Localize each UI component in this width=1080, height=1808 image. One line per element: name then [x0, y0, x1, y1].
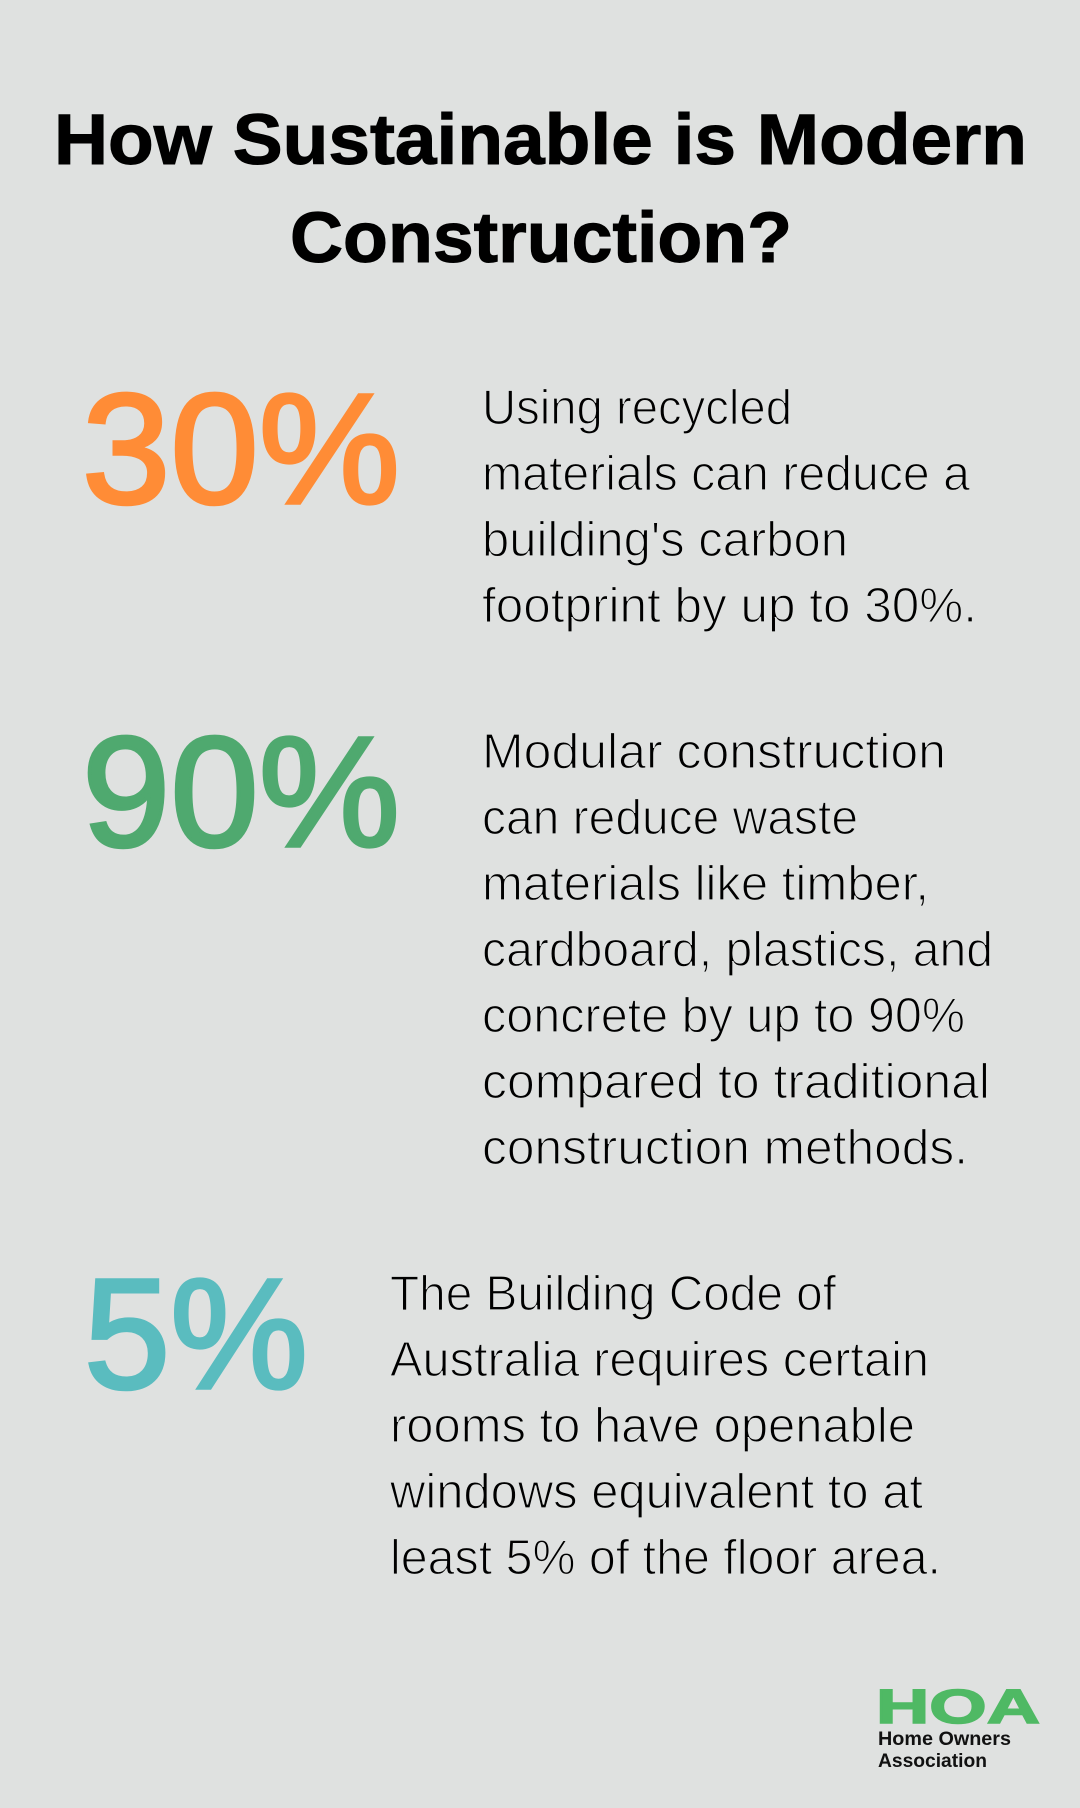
- stat: 5% openable windows: [84, 1247, 941, 1585]
- text: recycled materials description: materials can reduce a: [482, 447, 971, 501]
- logo: Home Owners Association: [876, 1681, 1040, 1772]
- stat: 30% recycled materials: [82, 362, 977, 633]
- text: building code description: [389, 1267, 941, 1585]
- text: modular construction description: can reduce waste: [482, 791, 858, 845]
- logo text: Association: [878, 1751, 987, 1772]
- text: recycled materials description: [482, 381, 977, 633]
- text: building code description: rooms to have openable: [390, 1399, 915, 1453]
- text: modular construction description: compared to traditional: [482, 1055, 990, 1109]
- text: modular construction description: concrete by up to 90%: [482, 989, 965, 1043]
- text: recycled materials description: Using recycled: [482, 381, 792, 435]
- logo text: [878, 1729, 1011, 1772]
- text: building code description: The Building Code of: [390, 1267, 836, 1321]
- number: 5%: 5%: [84, 1247, 308, 1422]
- text: modular construction description: cardboard, plastics, and: [482, 923, 993, 977]
- text: recycled materials description: footprint by up to 30%.: [482, 579, 977, 633]
- logo text: Home Owners: [878, 1729, 1011, 1750]
- title: How Sustainable is Modern: [54, 101, 1027, 180]
- text: building code description: windows equivalent to at: [389, 1465, 923, 1519]
- number: 30%: 30%: [82, 362, 400, 537]
- text: building code description: least 5% of the floor area.: [390, 1531, 941, 1585]
- title: Construction?: [290, 199, 792, 278]
- text: building code description: Australia requires certain: [390, 1333, 929, 1387]
- text: modular construction description: [482, 725, 993, 1175]
- logo mark: HOA: HOA: [876, 1681, 1040, 1734]
- title: [54, 101, 1027, 278]
- text: modular construction description: materials like timber,: [482, 857, 929, 911]
- number: 90%: 90%: [82, 705, 400, 880]
- text: modular construction description: construction methods.: [482, 1121, 968, 1175]
- text: recycled materials description: building's carbon: [482, 513, 848, 567]
- stat: 90% modular construction: [82, 705, 993, 1175]
- text: modular construction description: Modular construction: [482, 725, 946, 779]
